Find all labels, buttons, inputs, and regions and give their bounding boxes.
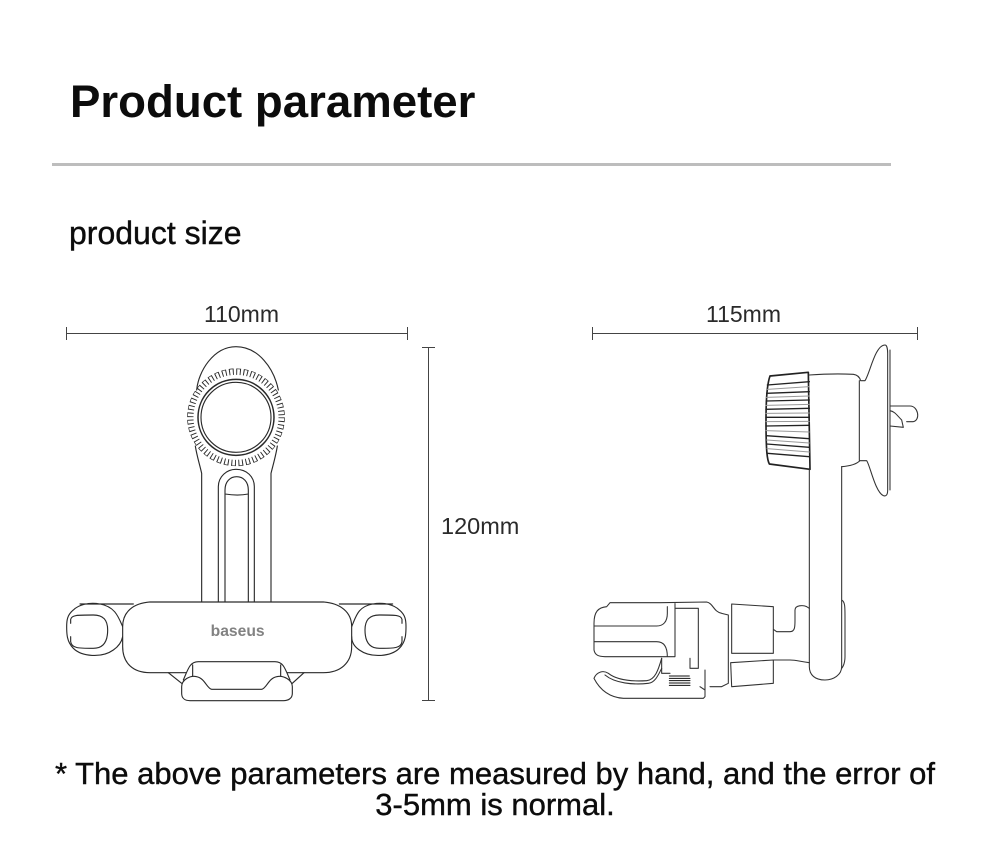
- header divider: [52, 163, 891, 166]
- dimension label: width 110mm: 110mm: [204, 301, 279, 327]
- front view of car mount: [67, 347, 406, 701]
- cradle body: [123, 602, 352, 673]
- arm: [809, 467, 845, 680]
- left gripper arm: [67, 603, 133, 655]
- dimension label: height 120mm: 120mm: [441, 513, 519, 539]
- head and suction base: [809, 345, 890, 496]
- right gripper arm: [339, 603, 406, 655]
- ball joint connector: [731, 604, 809, 687]
- bottom clip: [168, 662, 304, 683]
- dimension line: 120mm: [422, 348, 435, 700]
- knob with ribs: [766, 372, 810, 469]
- footnote: * The above parameters are measured by hand, and the error of: [55, 756, 935, 791]
- vent hook: [890, 406, 918, 427]
- dimension line: 115mm: [592, 327, 918, 340]
- dimension line: 110mm: [66, 327, 408, 340]
- mount head and stem outline: [195, 347, 278, 602]
- footnote: 3-5mm is normal.: [375, 786, 615, 822]
- clamp lower jaw: [594, 658, 705, 698]
- footnote: [55, 756, 936, 822]
- magnetic disc: [198, 379, 274, 455]
- brand logo: baseus: [211, 623, 265, 640]
- rotary knob teeth: [190, 372, 282, 463]
- stem slot: [218, 469, 254, 602]
- clamp body: [594, 602, 728, 687]
- title: Product parameter: [70, 76, 475, 127]
- dimension label: depth 115mm: 115mm: [706, 301, 781, 327]
- clamp hatched detail: [669, 676, 690, 685]
- side view of car mount: [594, 345, 918, 698]
- bottom foot pad: [182, 676, 292, 701]
- subheading: product size: product size: [69, 215, 242, 251]
